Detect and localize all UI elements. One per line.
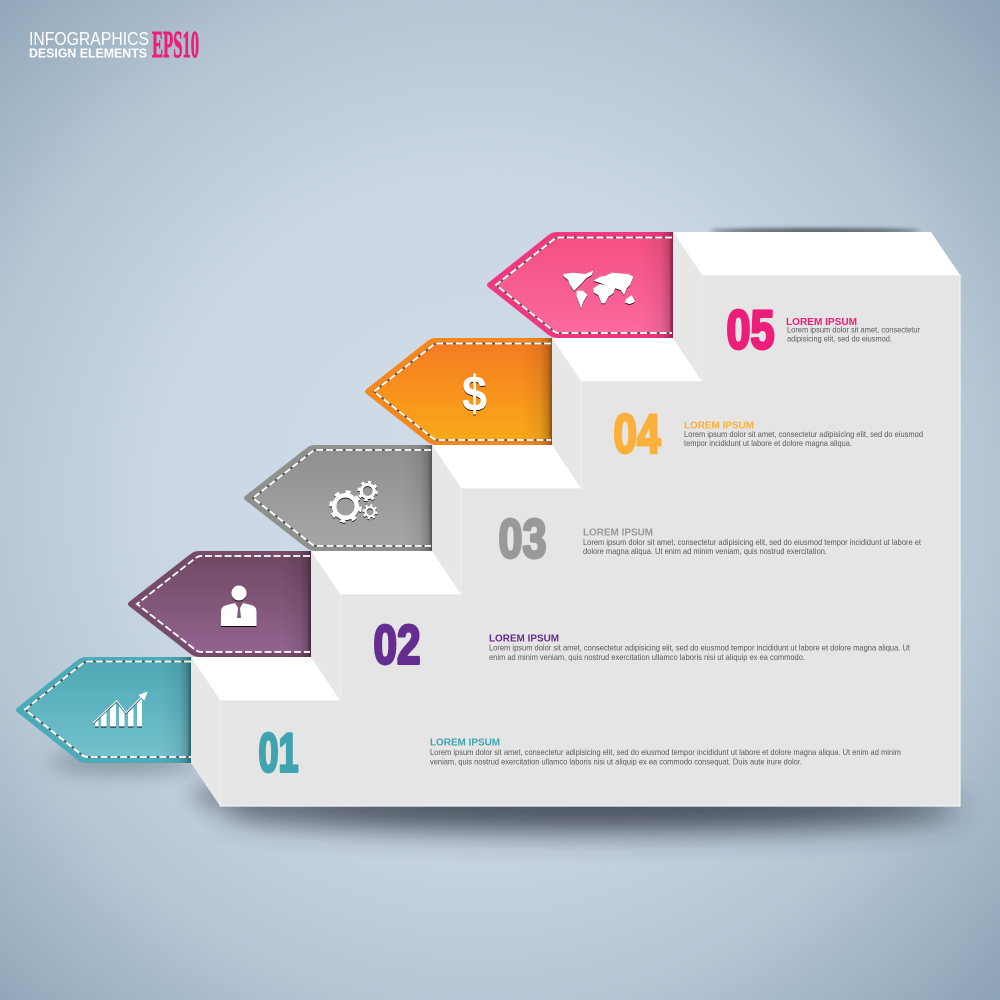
stitching bbox=[496, 238, 672, 333]
text 03: dolore magna aliqua. Ut enim ad minim veniam, quis nostrud exercitation. bbox=[583, 546, 827, 556]
icon: dollar sign: $ bbox=[462, 366, 487, 422]
right edge shade bbox=[522, 338, 552, 445]
front face bbox=[220, 275, 960, 806]
stitching bbox=[137, 556, 310, 652]
right edge shade bbox=[161, 657, 191, 763]
arrow 02: purple bbox=[130, 551, 311, 657]
number 01: 01 bbox=[258, 722, 298, 784]
shadow above staircase top bbox=[710, 228, 920, 234]
arrow 01: teal bbox=[18, 657, 191, 763]
title line 1: INFOGRAPHICS bbox=[29, 29, 149, 49]
step 04 content bbox=[614, 402, 923, 464]
arrow body bbox=[130, 554, 311, 654]
number 02: 02 bbox=[374, 614, 420, 676]
stitching bbox=[374, 344, 551, 440]
step risers bbox=[191, 232, 702, 806]
title bbox=[29, 24, 199, 66]
arrowhead bbox=[138, 692, 148, 700]
number 04: 04 bbox=[614, 402, 661, 464]
step 02 content bbox=[374, 614, 911, 676]
staircase block bbox=[191, 232, 960, 806]
trend line shadow bbox=[93, 696, 143, 724]
text 04: tempor incididunt ut labore et dolore magna aliqua. bbox=[684, 438, 852, 448]
title line 2: DESIGN ELEMENTS bbox=[29, 46, 147, 60]
text 01: Lorem ipsum dolor sit amet, consectetur adipisicing elit, sed do eiusmod tempor incididunt ut labore et dolore magna aliqua. Ut enim ad minim bbox=[430, 747, 901, 757]
text 04: Lorem ipsum dolor sit amet, consectetur adipisicing elit, sed do eiusmod bbox=[684, 429, 923, 439]
heading 02: LOREM IPSUM bbox=[489, 633, 559, 645]
text 01: veniam, quis nostrud exercitation ullamco laboris nisi ut aliquip ex ea commodo consequat. Duis aute irure dolor. bbox=[430, 756, 802, 766]
icon: world map bbox=[563, 271, 635, 308]
step 01 content bbox=[258, 722, 901, 784]
right edge shade bbox=[402, 445, 432, 551]
arrow body bbox=[246, 448, 432, 548]
shadow beside staircase corner bbox=[190, 779, 290, 811]
shadow under staircase bbox=[220, 784, 960, 832]
arrow 03: gray bbox=[246, 445, 432, 551]
icon: person bbox=[221, 586, 256, 626]
number 03: 03 bbox=[498, 508, 546, 570]
arrow body bbox=[490, 234, 673, 336]
infographic canvas: EPS10 bbox=[152, 24, 199, 66]
arrow body bbox=[18, 660, 191, 760]
number 05: 05 bbox=[726, 298, 774, 360]
arrow 05: pink bbox=[490, 232, 673, 338]
heading 04: LOREM IPSUM bbox=[684, 420, 754, 432]
text 05: Lorem ipsum dolor sit amet, consectetur bbox=[787, 325, 920, 335]
heading 05: LOREM IPSUM bbox=[786, 316, 857, 328]
stitching bbox=[25, 662, 191, 757]
step 03 content bbox=[498, 508, 922, 570]
icon: growth chart bbox=[93, 692, 148, 726]
text 05: adipisicing elit, sed do eiusmod. bbox=[787, 334, 892, 344]
text 03: Lorem ipsum dolor sit amet, consectetur adipisicing elit, sed do eiusmod tempor incididunt ut labore et bbox=[583, 537, 922, 547]
text 02: enim ad minim veniam, quis nostrud exercitation ullamco laboris nisi ut aliquip ex ea commodo. bbox=[489, 652, 805, 662]
heading 03: LOREM IPSUM bbox=[583, 527, 653, 539]
arrow body bbox=[368, 340, 552, 442]
text 02: Lorem ipsum dolor sit amet, consectetur adipisicing elit, sed do eiusmod tempor incididunt ut labore et dolore magna aliqua. Ut bbox=[489, 643, 911, 653]
step treads bbox=[191, 232, 960, 700]
right edge shade bbox=[281, 551, 311, 657]
arrow 04: orange bbox=[368, 338, 552, 445]
shadow under first arrow bbox=[50, 752, 200, 772]
heading 01: LOREM IPSUM bbox=[430, 736, 500, 748]
chart bars bbox=[95, 698, 142, 726]
right edge shade bbox=[643, 232, 673, 338]
step 05 content bbox=[726, 298, 920, 360]
stitching bbox=[253, 450, 431, 546]
icon: gears bbox=[331, 482, 377, 521]
trend line bbox=[93, 695, 143, 723]
